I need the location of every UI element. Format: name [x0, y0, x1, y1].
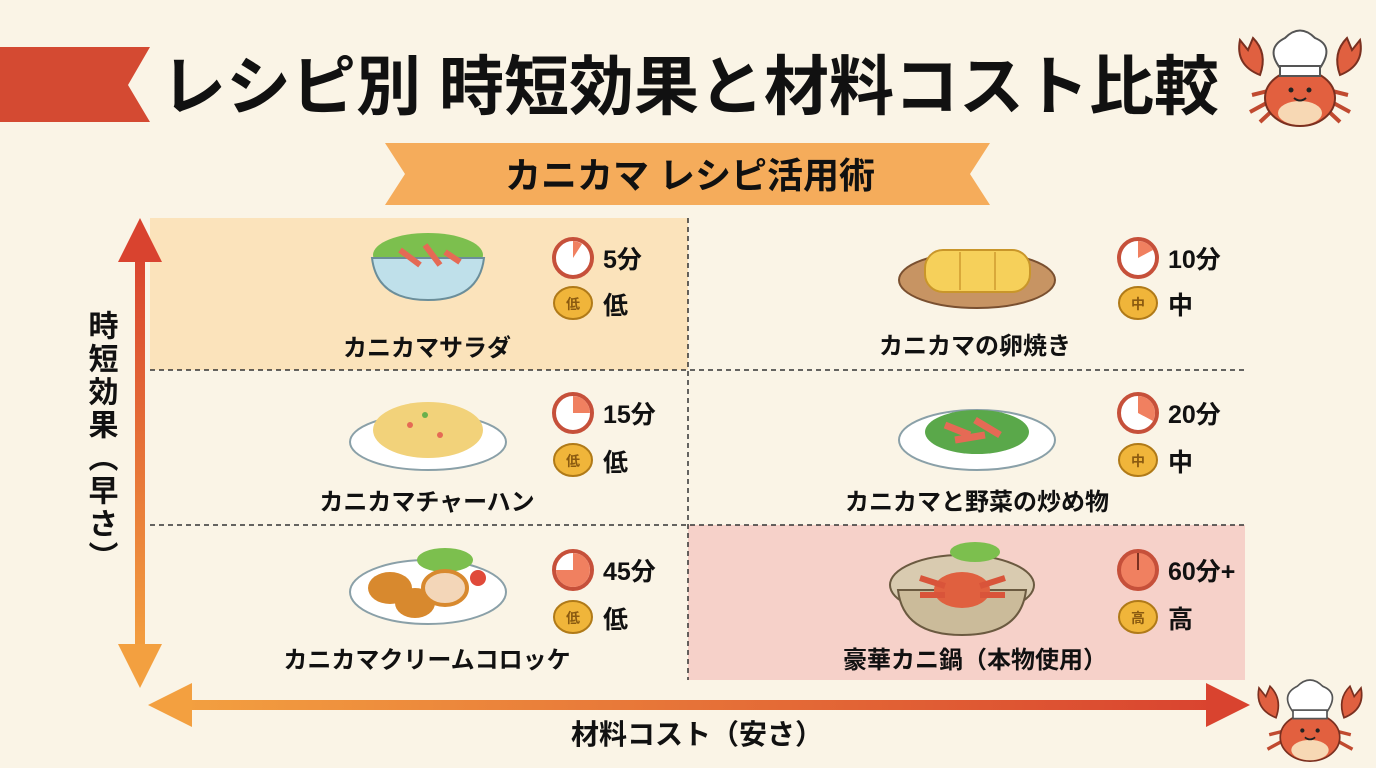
icon: coin mid — [1119, 287, 1157, 319]
icon: fried rice plate — [350, 402, 506, 470]
subtitle ribbon: カニカマ レシピ活用術 — [505, 155, 875, 196]
cell: fried rice: 低 — [603, 449, 628, 477]
cell: stir fry: 20分 — [1168, 401, 1221, 429]
cell: fried rice: 15分 — [603, 401, 656, 429]
icon: clock 5 — [554, 239, 592, 277]
icon: coin mid: 中 — [1131, 453, 1145, 469]
x-axis label: 材料コスト（安さ） — [571, 719, 823, 750]
cell: omelette: 10分 — [1168, 246, 1221, 274]
cell: stir fry: カニカマと野菜の炒め物 — [845, 489, 1109, 516]
cell: croquette — [283, 548, 656, 674]
cell: crab hot pot: 豪華カニ鍋（本物使用） — [843, 647, 1107, 674]
icon: coin high — [1119, 601, 1157, 633]
cell: omelette — [879, 239, 1221, 360]
cell: stir fry: 中 — [1168, 449, 1193, 477]
panel: grid quadrants — [150, 218, 1245, 680]
icon: coin low: 低 — [566, 610, 580, 626]
subtitle ribbon — [385, 143, 990, 205]
arrow: vertical axis — [118, 218, 162, 688]
cell: fried rice — [319, 394, 656, 516]
cell: salad: 低 — [603, 292, 628, 320]
icon: coin low — [554, 287, 592, 319]
icon: crab hot pot — [890, 542, 1034, 635]
cell: crab hot pot: 高 — [1168, 606, 1193, 634]
icon: coin mid: 中 — [1131, 296, 1145, 312]
icon: chef crab top — [1239, 30, 1361, 126]
cell: stir fry — [845, 394, 1221, 516]
icon: clock 60 — [1119, 551, 1157, 589]
icon: chef crab bottom — [1258, 680, 1362, 761]
icon: clock 10 — [1119, 239, 1157, 277]
cell: salad — [343, 233, 642, 362]
cell: crab hot pot: 60分+ — [1168, 558, 1235, 586]
icon: coin mid — [1119, 444, 1157, 476]
cell: croquette: 45分 — [603, 558, 656, 586]
cell: croquette: 低 — [603, 606, 628, 634]
cell: salad: 5分 — [603, 246, 642, 274]
y-axis label: 時短効果（早さ） — [84, 310, 118, 574]
icon: tamagoyaki — [899, 250, 1055, 308]
icon: coin low: 低 — [566, 453, 580, 469]
icon: coin low: 低 — [566, 296, 580, 312]
icon: salad bowl — [372, 233, 484, 300]
icon: stir fry plate — [899, 410, 1055, 470]
icon: clock 15 — [554, 394, 592, 432]
icon: coin low — [554, 444, 592, 476]
cell: omelette: カニカマの卵焼き — [879, 333, 1071, 360]
cell: crab hot pot — [843, 542, 1235, 674]
cell: omelette: 中 — [1168, 292, 1193, 320]
icon: croquette plate — [350, 548, 506, 624]
icon: clock 20 — [1119, 394, 1157, 432]
title ribbon — [0, 47, 150, 122]
icon: clock 45 — [554, 551, 592, 589]
cell: salad: カニカマサラダ — [343, 334, 511, 362]
arrow: horizontal axis — [148, 683, 1250, 727]
title: レシピ別 時短効果と材料コスト比較 — [161, 50, 1219, 123]
cell: fried rice: カニカマチャーハン — [319, 489, 535, 516]
icon: coin low — [554, 601, 592, 633]
cell: croquette: カニカマクリームコロッケ — [283, 647, 571, 674]
icon: coin high: 高 — [1131, 610, 1145, 626]
